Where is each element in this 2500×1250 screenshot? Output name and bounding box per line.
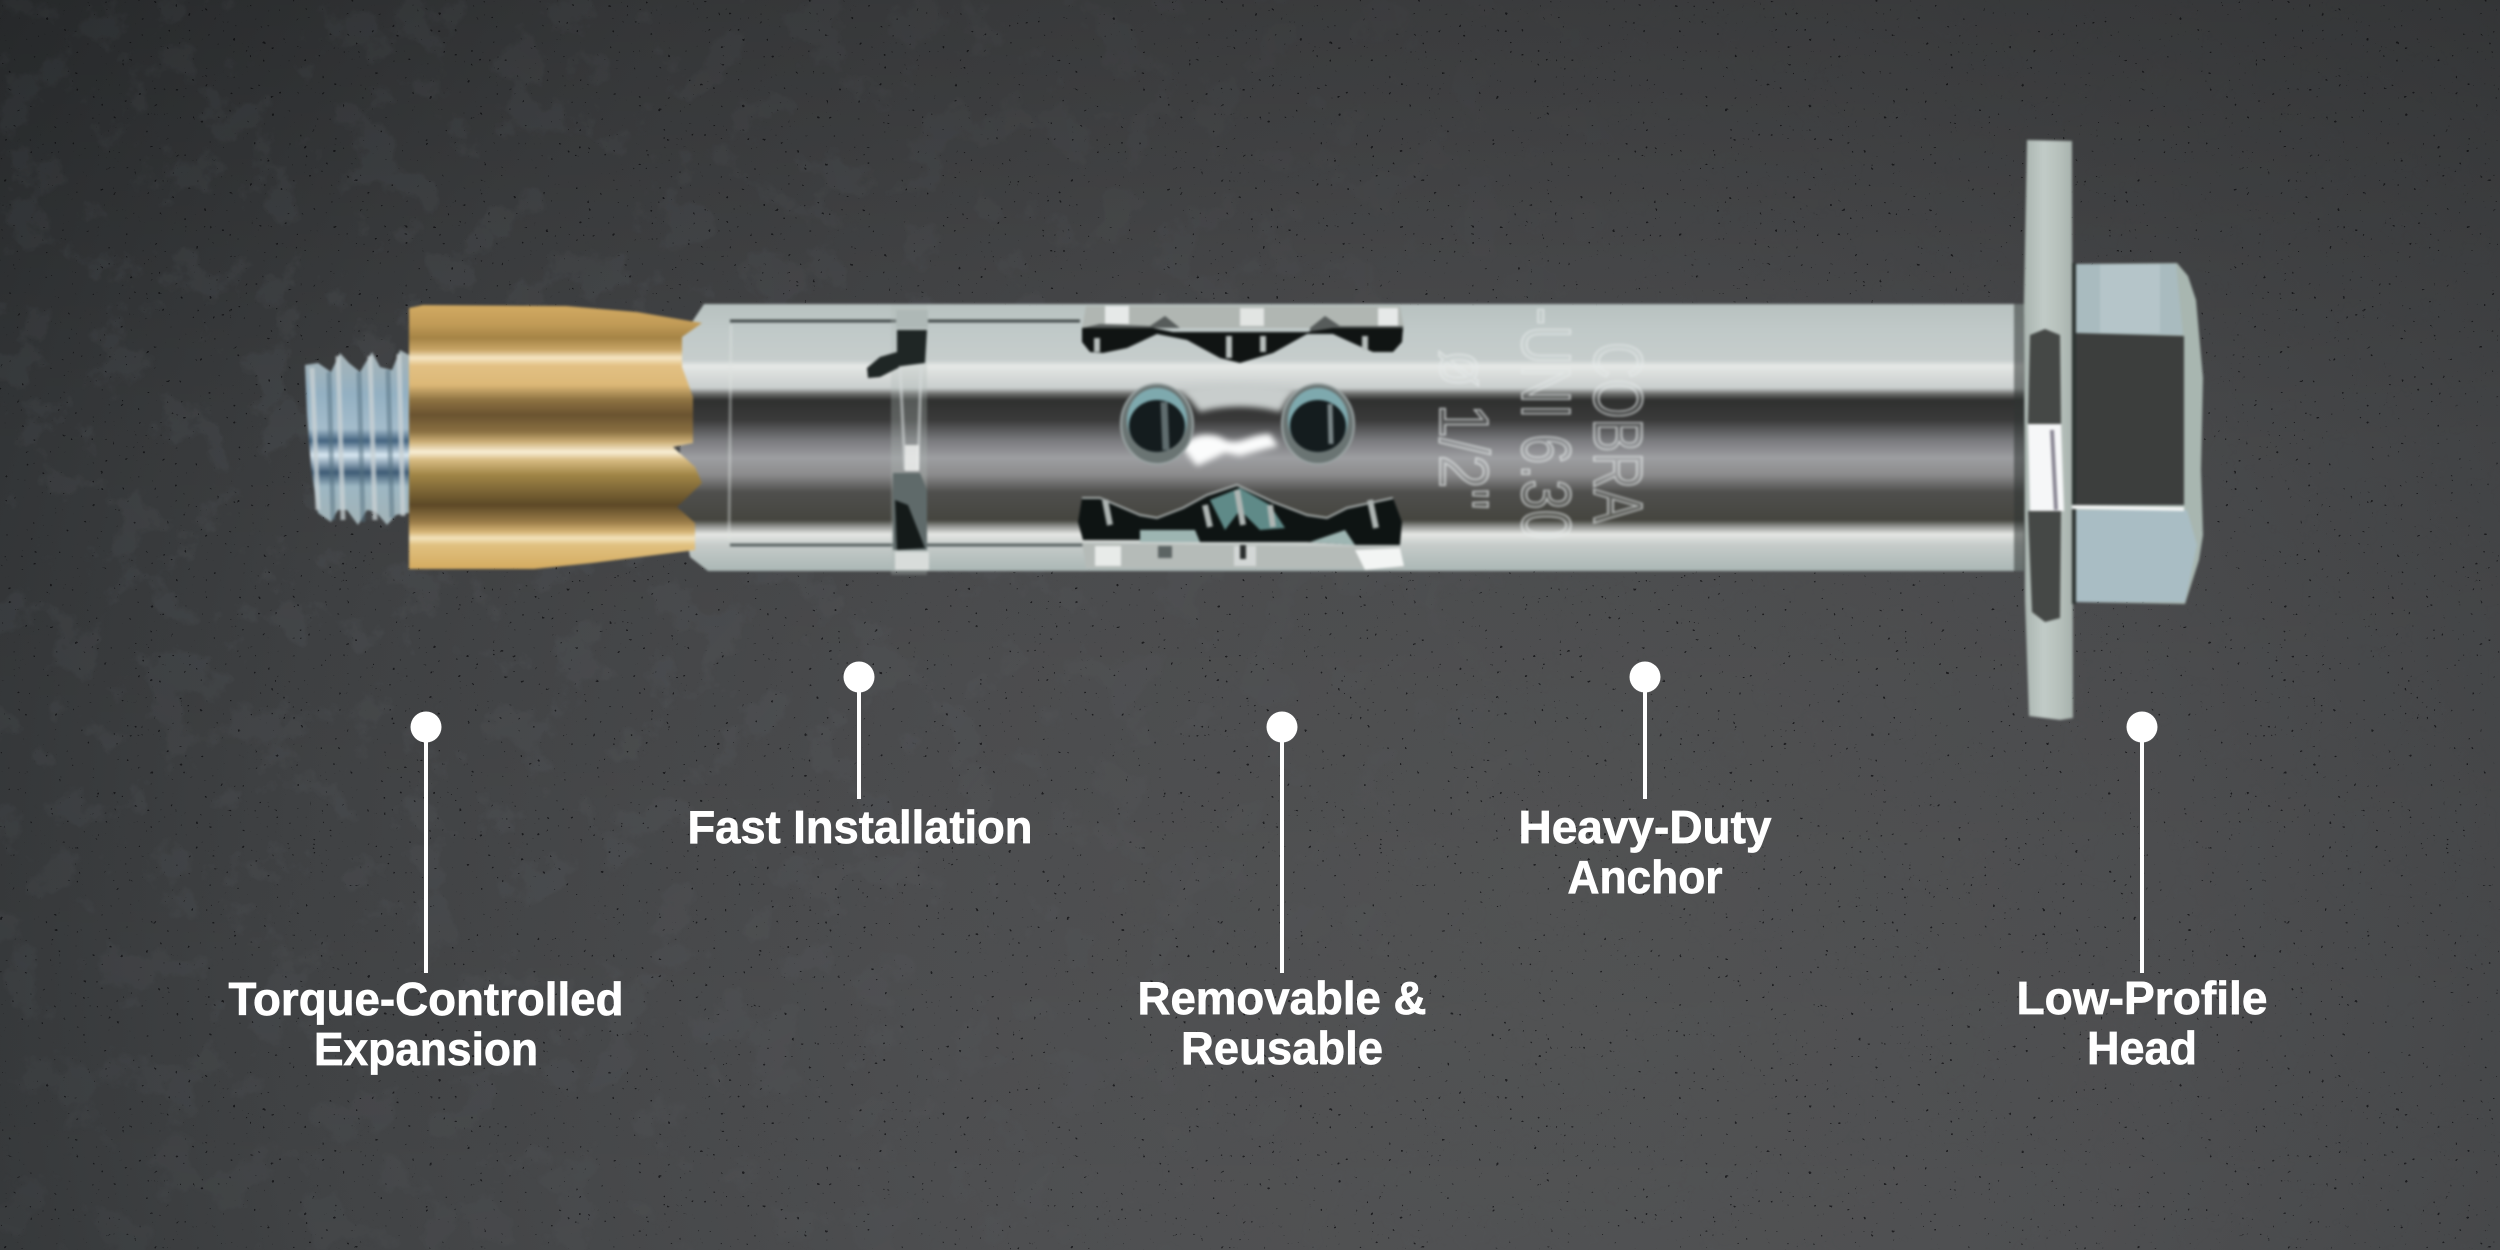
callout: fast installation: Fast Installation	[688, 801, 1032, 853]
centre light wave	[1180, 384, 1295, 412]
callout: torque-controlled expansion: Torque-Controlled	[228, 973, 624, 1025]
vertical groove	[729, 325, 731, 540]
callout: heavy-duty anchor	[1518, 662, 1772, 903]
stamped marking: UNI code: -UNI 6.30	[1507, 307, 1585, 540]
flat washer	[2024, 140, 2076, 720]
centre glare	[1182, 434, 1278, 466]
lower expansion slot	[1078, 485, 1402, 545]
stamped marking: COBRA: COBRA	[1579, 342, 1657, 523]
upper sleeve seam	[730, 320, 1080, 322]
callout: removable and reusable	[1138, 712, 1426, 1074]
brass expansion cone	[409, 305, 702, 569]
hex bolt head	[2072, 263, 2203, 604]
callout: removable and reusable: Removable &	[1138, 972, 1426, 1024]
callout: fast installation	[688, 662, 1032, 853]
left dimple	[1121, 384, 1193, 464]
stamped marking: size: ø 1/2"	[1425, 350, 1503, 510]
callout: torque-controlled expansion	[228, 712, 624, 1075]
expansion clip upper strip	[1082, 306, 1404, 332]
callout: torque-controlled expansion: Expansion	[314, 1023, 538, 1075]
left slit	[867, 304, 929, 575]
lower sleeve seam	[730, 544, 1085, 546]
sleeve anchor product	[305, 140, 2203, 720]
callout: removable and reusable: Reusable	[1181, 1022, 1383, 1074]
callout: heavy-duty anchor: Heavy-Duty	[1518, 801, 1772, 853]
callout: low-profile head	[2016, 712, 2268, 1074]
steel sleeve	[680, 304, 2025, 575]
upper expansion slot	[1082, 328, 1403, 363]
callout: low-profile head: Low-Profile	[2016, 972, 2268, 1024]
callout: heavy-duty anchor: Anchor	[1568, 851, 1723, 903]
expansion clip lower strip	[1082, 543, 1404, 570]
right dimple	[1282, 384, 1354, 464]
callout: low-profile head: Head	[2087, 1022, 2197, 1074]
threaded stud	[305, 350, 409, 525]
sleeve end shadow	[2014, 304, 2025, 571]
